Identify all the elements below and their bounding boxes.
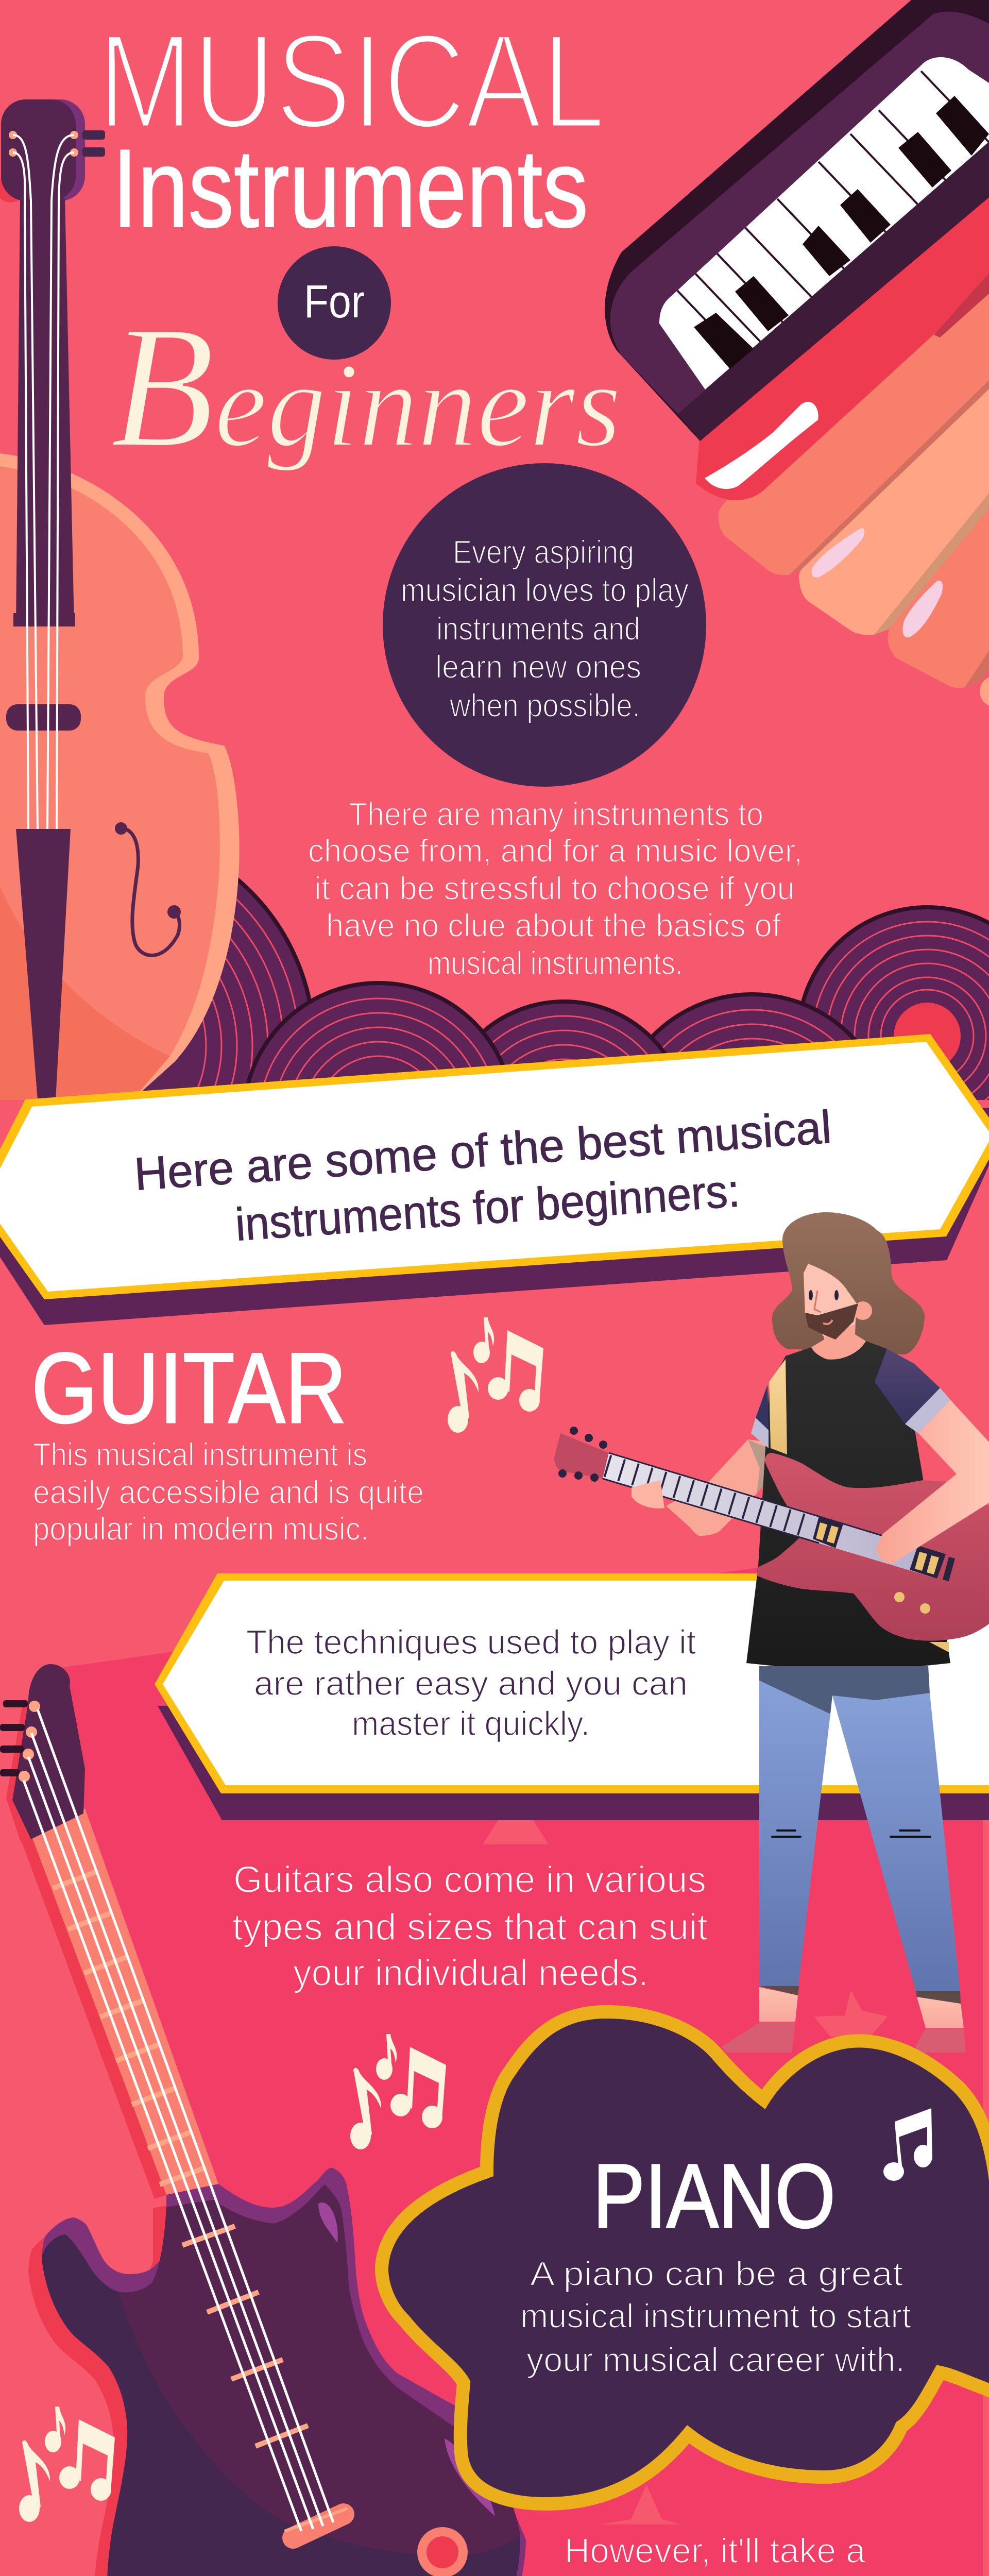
first key edge	[789, 380, 989, 575]
electric guitar	[554, 1427, 989, 1652]
keyboard housing	[605, 0, 989, 441]
guitar body upper panel	[119, 2185, 520, 2556]
record 5	[801, 905, 989, 1100]
guitar highlights	[318, 2202, 338, 2243]
guitar section text: easily accessible and is quite	[33, 1475, 424, 1511]
guitar headstock	[12, 1664, 85, 1839]
decorative star	[814, 1990, 888, 2037]
violin illustration	[0, 99, 240, 1100]
intro circle text: when possible.	[449, 688, 640, 724]
guitars text: Guitars also come in various	[233, 1859, 706, 1901]
piano blob panel	[382, 2012, 989, 2504]
intro paragraph: musical instruments.	[428, 945, 683, 981]
banner text: Here are some of the best musical	[133, 1101, 833, 1200]
white keys	[659, 57, 989, 389]
icon: music notes 3	[19, 2406, 115, 2522]
right sleeve	[875, 1349, 940, 1424]
icon: music notes 1	[448, 1317, 543, 1433]
For badge	[278, 246, 391, 360]
guitar body dark	[42, 2185, 520, 2576]
callout: techniques: master it quickly.	[352, 1704, 590, 1742]
violin headstock	[0, 174, 25, 202]
guitar section text: This musical instrument is	[33, 1437, 367, 1473]
guitars text: types and sizes that can suit	[232, 1907, 708, 1948]
callout: techniques	[155, 1573, 989, 1820]
record 2	[246, 981, 505, 1083]
vinyl records	[142, 877, 989, 1100]
guitar neck	[603, 1453, 944, 1579]
banner: best instruments	[0, 1034, 989, 1325]
intro circle	[383, 463, 706, 787]
second key edge	[874, 493, 989, 635]
key highlights	[812, 528, 864, 578]
decorative cone 2	[599, 2485, 681, 2524]
callout: techniques: are rather easy and you can	[254, 1664, 688, 1702]
big electric guitar	[0, 1664, 526, 2576]
guitar frets	[53, 1871, 308, 2446]
pickups	[813, 1516, 843, 1548]
guitar headstock	[554, 1433, 609, 1479]
guitarist trousers	[759, 1681, 830, 1986]
face	[804, 1264, 857, 1337]
intro circle text: Every aspiring	[453, 534, 634, 570]
first key	[719, 278, 989, 575]
guitar section text	[33, 1437, 424, 1547]
intro circle text: instruments and	[436, 611, 640, 647]
violin strings	[13, 135, 74, 829]
piano heading: PIANO	[593, 2146, 835, 2247]
intro paragraph: choose from, and for a music lover,	[308, 833, 803, 869]
intro paragraph: There are many instruments to	[349, 796, 763, 833]
guitar section text: popular in modern music.	[33, 1511, 369, 1547]
guitar section heading: GUITAR	[31, 1332, 347, 1444]
icon: music notes 2	[350, 2034, 446, 2149]
piano text: A piano can be a great	[530, 2255, 903, 2293]
red keyboard case	[696, 197, 989, 500]
key dividers	[676, 71, 989, 370]
title: Beginners script: Beginners	[110, 290, 621, 484]
left sleeve	[756, 1385, 769, 1430]
intro circle text	[401, 534, 689, 724]
keyboard illustration	[605, 0, 989, 707]
shoes	[721, 2022, 795, 2053]
icon: white beamed note	[883, 2108, 932, 2181]
violin f-hole	[115, 822, 181, 955]
beard	[805, 1303, 858, 1340]
guitar body rim	[42, 2167, 526, 2576]
hair	[772, 1212, 925, 1354]
black keys	[694, 96, 989, 369]
guitar body shadow	[28, 2181, 513, 2576]
record 1	[142, 877, 311, 1091]
piano text	[520, 2255, 911, 2379]
piano text: musical instrument to start	[520, 2297, 911, 2335]
guitar neck shadow	[21, 1834, 166, 2199]
title: Instruments: Instruments	[112, 126, 588, 250]
intro circle text: learn new ones	[435, 649, 641, 685]
title block	[98, 6, 621, 484]
guitar strap	[769, 1359, 787, 1454]
knobs	[894, 1592, 905, 1602]
third key	[888, 495, 989, 688]
record 4	[651, 992, 857, 1053]
knee marks	[772, 1831, 930, 1837]
intro paragraph: it can be stressful to choose if you	[314, 871, 795, 907]
neck and collar	[811, 1309, 866, 1360]
intro paragraph: have no clue about the basics of	[326, 908, 781, 944]
guitar fretboard	[31, 1808, 218, 2195]
violin body	[0, 453, 240, 1100]
shirt	[746, 1341, 950, 1674]
eyes and nose	[809, 1290, 813, 1300]
guitars text: your individual needs.	[293, 1953, 649, 1994]
left arm	[666, 1439, 773, 1536]
fretting hand	[632, 1480, 664, 1509]
banner text	[133, 1101, 837, 1258]
decorative cone 1	[483, 1820, 549, 1844]
guitar knob	[417, 2527, 468, 2576]
title: MUSICAL: MUSICAL	[98, 6, 605, 157]
For badge: For	[304, 276, 365, 328]
record 3	[483, 999, 667, 1065]
white slot	[705, 402, 819, 489]
guitar bridge	[293, 2514, 344, 2538]
banner text: instruments for beginners:	[234, 1165, 741, 1251]
guitar tuning pegs	[0, 1700, 28, 1776]
piano text: your musical career with.	[526, 2341, 905, 2379]
violin tailpiece	[16, 829, 71, 1100]
ankles	[759, 1987, 798, 2022]
guitar strings	[24, 1709, 333, 2531]
intro circle text: musician loves to play	[401, 572, 689, 608]
right arm	[876, 1400, 989, 1564]
violin neck	[16, 198, 74, 626]
guitarist figure	[554, 1212, 989, 2053]
violin bridge	[6, 704, 81, 731]
callout text: The techniques used to play it	[246, 1623, 696, 1661]
second key	[799, 389, 989, 635]
intro paragraph	[308, 796, 803, 981]
piano note text: However, it'll take a	[565, 2531, 865, 2570]
darker pink backdrop wedge	[50, 1535, 983, 2576]
guitars text	[232, 1859, 708, 1994]
